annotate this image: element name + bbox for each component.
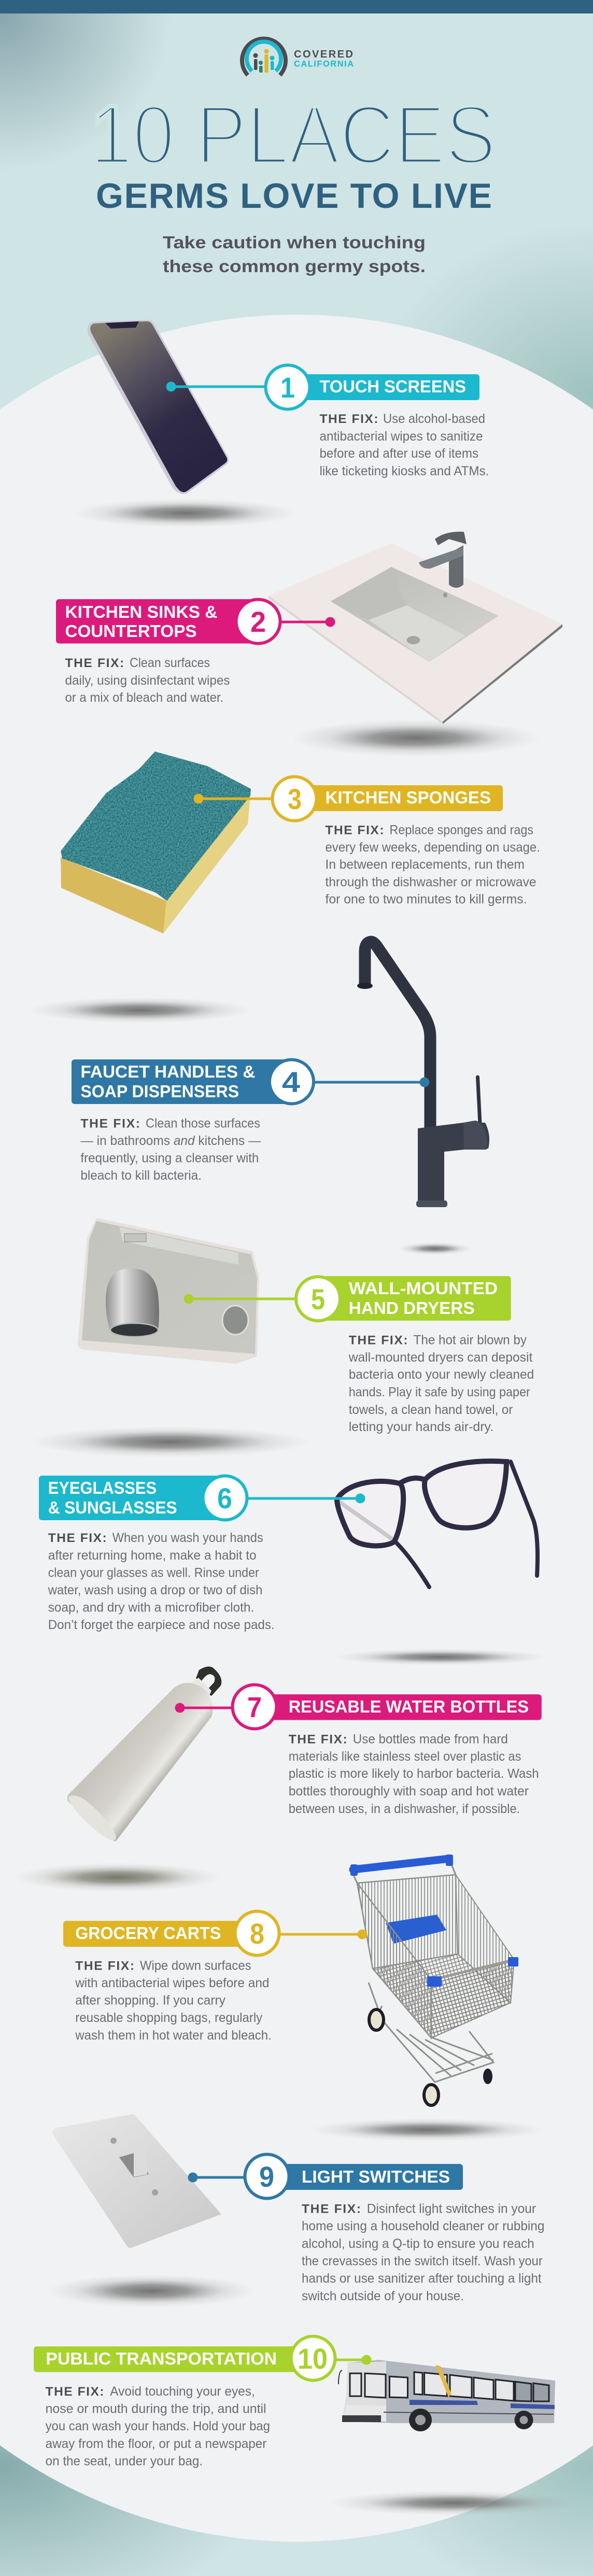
icon: sink bbox=[269, 532, 562, 724]
intro text: Take caution when touching bbox=[163, 233, 426, 252]
banner: REUSABLE WATER BOTTLES bbox=[289, 1697, 529, 1716]
item 9: light switches bbox=[48, 2114, 544, 2308]
fix text: before and after use of items bbox=[319, 446, 478, 461]
icon: bus bbox=[338, 2360, 555, 2431]
fix text: hands or use sanitizer after touching a light bbox=[302, 2271, 542, 2286]
glasses shadow bbox=[334, 1649, 547, 1665]
fix text: Wipe down surfaces bbox=[140, 1959, 251, 1973]
banner bbox=[296, 1276, 511, 1321]
banner: TOUCH SCREENS bbox=[319, 377, 466, 396]
banner: FAUCET HANDLES & bbox=[80, 1062, 255, 1081]
fix text: reusable shopping bags, regularly bbox=[75, 2011, 263, 2025]
fix text: THE FIX: bbox=[319, 412, 378, 426]
fix text: hands. Play it safe by using paper bbox=[349, 1385, 530, 1399]
fix text: THE FIX: bbox=[46, 2385, 104, 2399]
banner bbox=[39, 1476, 247, 1520]
fix text: THE FIX: bbox=[349, 1333, 407, 1347]
connector bbox=[277, 1933, 362, 1935]
banner: 3 bbox=[288, 783, 302, 815]
fix text: The hot air blown by bbox=[414, 1333, 527, 1347]
banner: HAND DRYERS bbox=[349, 1298, 475, 1318]
fix text: daily, using disinfectant wipes bbox=[65, 673, 230, 688]
icon: hand dryer bbox=[78, 1218, 259, 1364]
fix text: soap, and dry with a microfiber cloth. bbox=[48, 1601, 254, 1615]
intro text bbox=[163, 233, 426, 276]
fix text: home using a household cleaner or rubbing bbox=[302, 2219, 544, 2233]
cart shadow bbox=[310, 2118, 544, 2141]
banner bbox=[72, 1059, 314, 1104]
fix text bbox=[348, 1333, 534, 1434]
dryer shadow bbox=[30, 1426, 310, 1457]
banner: EYEGLASSES bbox=[48, 1478, 157, 1497]
fix text: every few weeks, depending on usage. bbox=[326, 840, 540, 855]
fix text: after returning home, make a habit to bbox=[48, 1548, 257, 1563]
fix text: wash them in hot water and bleach. bbox=[75, 2028, 272, 2043]
banner: 8 bbox=[250, 1917, 264, 1950]
fix text: THE FIX: bbox=[75, 1959, 134, 1973]
banner bbox=[56, 599, 280, 644]
fix text: switch outside of your house. bbox=[302, 2289, 464, 2303]
sponge shadow bbox=[29, 997, 251, 1023]
fix text: In between replacements, run them bbox=[326, 857, 525, 872]
bus shadow bbox=[329, 2490, 578, 2515]
banner: PUBLIC TRANSPORTATION bbox=[46, 2349, 277, 2368]
fix text: Disinfect light switches in your bbox=[367, 2202, 536, 2216]
banner: 9 bbox=[259, 2160, 274, 2193]
fix text: towels, a clean hand towel, or bbox=[349, 1403, 513, 1417]
top bar bbox=[0, 0, 593, 13]
connector bbox=[193, 2176, 249, 2179]
connector bbox=[244, 1497, 360, 1500]
icon: water bottle bbox=[67, 1666, 221, 1841]
phone shadow bbox=[74, 499, 296, 528]
icon: light switch bbox=[53, 2114, 221, 2248]
icon: faucet bbox=[357, 942, 489, 1207]
icon: sponge bbox=[61, 752, 251, 933]
connector bbox=[189, 1298, 298, 1300]
fix text: the crevasses in the switch itself. Wash your bbox=[302, 2254, 543, 2268]
fix text: frequently, using a cleanser with bbox=[80, 1151, 259, 1165]
fix text: bleach to kill bacteria. bbox=[80, 1168, 202, 1183]
icon: glasses bbox=[337, 1461, 538, 1587]
banner: COUNTERTOPS bbox=[65, 621, 197, 641]
item 4: faucet handles bbox=[72, 942, 489, 1255]
banner: KITCHEN SINKS & bbox=[65, 602, 218, 621]
banner: LIGHT SWITCHES bbox=[302, 2167, 450, 2186]
fix text: letting your hands air-dry. bbox=[349, 1420, 493, 1434]
subtitle: GERMS LOVE TO LIVE: GERMS LOVE TO LIVE bbox=[96, 176, 492, 216]
fix text: THE FIX: bbox=[48, 1531, 107, 1545]
fix text: water, wash using a drop or two of dish bbox=[48, 1583, 262, 1597]
item 3: kitchen sponges bbox=[29, 752, 540, 1023]
fix text bbox=[289, 1732, 539, 1816]
fix text bbox=[319, 412, 489, 478]
banner: 1 bbox=[280, 371, 295, 404]
fix text: antibacterial wipes to sanitize bbox=[319, 429, 483, 444]
fix text: clean your glasses as well. Rinse under bbox=[48, 1566, 259, 1580]
fix text bbox=[302, 2202, 544, 2303]
fix text: THE FIX: bbox=[302, 2202, 361, 2216]
fix text bbox=[46, 2384, 270, 2468]
banner: 5 bbox=[311, 1283, 325, 1315]
logo: Covered California bbox=[242, 39, 354, 75]
banner bbox=[245, 2154, 463, 2199]
fix text: between uses, in a dishwasher, if possible. bbox=[289, 1802, 520, 1816]
logo: Covered California: COVERED bbox=[294, 49, 353, 60]
fix text bbox=[326, 823, 540, 907]
connector bbox=[275, 621, 330, 623]
fix text: like ticketing kiosks and ATMs. bbox=[319, 464, 489, 478]
item 10: public transportation bbox=[34, 2337, 578, 2515]
banner: KITCHEN SPONGES bbox=[326, 788, 491, 807]
fix text: Replace sponges and rags bbox=[390, 823, 533, 838]
fix text: or a mix of bleach and water. bbox=[65, 690, 223, 705]
icon: smartphone bbox=[88, 320, 229, 494]
fix text: bottles thoroughly with soap and hot water bbox=[289, 1784, 529, 1799]
fix text: for one to two minutes to kill germs. bbox=[326, 892, 527, 907]
banner: 7 bbox=[247, 1691, 262, 1723]
banner: 10 bbox=[298, 2342, 328, 2375]
item 8: grocery carts bbox=[63, 1855, 544, 2141]
banner: 2 bbox=[250, 605, 266, 638]
switch shadow bbox=[48, 2274, 255, 2308]
banner: 6 bbox=[217, 1482, 232, 1515]
fix text: THE FIX: bbox=[289, 1732, 347, 1747]
banner bbox=[265, 365, 479, 409]
fix text bbox=[80, 1116, 261, 1183]
banner bbox=[63, 1912, 279, 1955]
fix text: Use bottles made from hard bbox=[353, 1732, 508, 1747]
fix text: — in bathrooms and kitchens — bbox=[80, 1134, 261, 1148]
fix text: Don’t forget the earpiece and nose pads. bbox=[48, 1618, 275, 1632]
banner: GROCERY CARTS bbox=[75, 1923, 221, 1943]
fix text bbox=[75, 1959, 272, 2043]
fix text: Use alcohol-based bbox=[383, 412, 485, 426]
connector bbox=[332, 2358, 366, 2361]
item 2: kitchen sinks bbox=[56, 532, 562, 757]
logo: Covered California: CALIFORNIA bbox=[294, 59, 354, 68]
sink shadow bbox=[291, 719, 540, 757]
fix text: Clean surfaces bbox=[130, 656, 210, 670]
fix text: after shopping. If you carry bbox=[75, 1993, 225, 2008]
fix text: with antibacterial wipes before and bbox=[75, 1976, 270, 1990]
fix text: THE FIX: bbox=[65, 656, 124, 670]
connector bbox=[311, 1081, 425, 1083]
fix text bbox=[65, 656, 230, 705]
fix text: THE FIX: bbox=[80, 1117, 140, 1131]
connector bbox=[171, 386, 270, 388]
fix text: materials like stainless steel over plastic as bbox=[289, 1749, 521, 1764]
fix text: wall-mounted dryers can deposit bbox=[348, 1350, 532, 1365]
fix text bbox=[48, 1531, 275, 1632]
fix text: alcohol, using a Q-tip to ensure you reach bbox=[302, 2237, 534, 2251]
banner: 4 bbox=[282, 1066, 300, 1098]
intro text: these common germy spots. bbox=[163, 257, 426, 276]
item 7: water bottles bbox=[13, 1666, 542, 1892]
banner bbox=[34, 2337, 335, 2380]
fix text: through the dishwasher or microwave bbox=[326, 875, 536, 889]
connector bbox=[180, 1706, 236, 1709]
fix text: When you wash your hands bbox=[112, 1531, 263, 1545]
fix text: plastic is more likely to harbor bacteria. Wash bbox=[289, 1766, 539, 1781]
item 5: hand dryers bbox=[30, 1218, 534, 1457]
banner bbox=[232, 1685, 542, 1729]
faucet shadow bbox=[398, 1242, 472, 1255]
fix text: away from the floor, or put a newspaper bbox=[46, 2437, 266, 2451]
icon: shopping cart bbox=[350, 1855, 518, 2105]
fix text: Clean those surfaces bbox=[146, 1116, 260, 1131]
fix text: you can wash your hands. Hold your bag bbox=[46, 2419, 270, 2433]
banner: SOAP DISPENSERS bbox=[80, 1082, 239, 1101]
bottle shadow bbox=[13, 1863, 221, 1892]
title: 10 PLACES: 10 PLACES bbox=[90, 88, 496, 182]
item 1: touch screens bbox=[74, 320, 489, 528]
banner: WALL-MOUNTED bbox=[349, 1279, 498, 1298]
item 6: eyeglasses bbox=[39, 1461, 547, 1665]
fix text: bacteria onto your newly cleaned bbox=[349, 1367, 534, 1382]
banner: & SUNGLASSES bbox=[48, 1498, 177, 1517]
fix text: THE FIX: bbox=[326, 823, 384, 838]
banner bbox=[273, 776, 503, 821]
fix text: Avoid touching your eyes, bbox=[110, 2384, 255, 2399]
connector bbox=[199, 797, 275, 800]
fix text: nose or mouth during the trip, and until bbox=[46, 2402, 266, 2416]
fix text: on the seat, under your bag. bbox=[46, 2454, 203, 2468]
